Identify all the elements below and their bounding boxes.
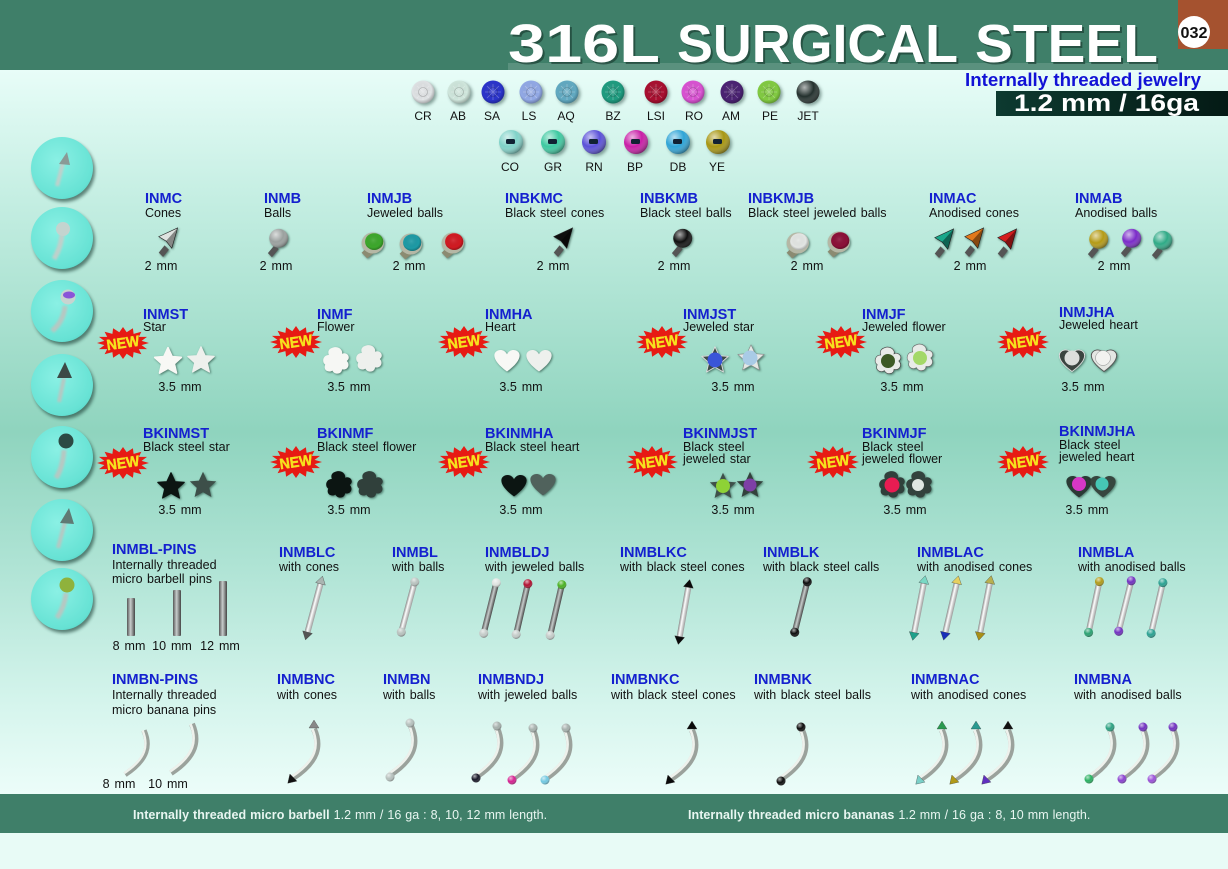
badge: new: NEW	[824, 332, 859, 353]
product: INMBN: INMBN	[383, 672, 431, 688]
row 5: bananas	[103, 672, 1182, 791]
product: INMBLAC	[908, 545, 1032, 641]
legend: anodised colours: DB	[670, 160, 686, 174]
badge: new: NEW	[816, 452, 851, 473]
product: INMAB: 2 mm	[1098, 259, 1130, 273]
legend: anodised colours: BP	[627, 160, 643, 174]
product: INMBLDJ	[478, 545, 584, 641]
product: INMBL-PINS	[112, 542, 240, 653]
product: INMBNC: INMBNC	[277, 672, 336, 688]
product: INMJB: INMJB	[367, 191, 412, 207]
product: BKINMJF: 3.5 mm	[883, 503, 927, 517]
product: INMBN-PINS: INMBN-PINS	[112, 672, 199, 688]
product: INMBN-PINS: 10 mm	[148, 777, 188, 791]
product: INMJF	[862, 307, 946, 394]
legend: crystal colours: AB	[450, 109, 466, 123]
product: INMBN	[382, 672, 435, 782]
product: INMB: INMB	[264, 191, 301, 207]
legend: anodised colours	[499, 130, 732, 174]
product: INMHA: 3.5 mm	[499, 380, 543, 394]
product: INMBNDJ: INMBNDJ	[478, 672, 544, 688]
product: INMB: 2 mm	[260, 259, 292, 273]
product: INMBL-PINS: 10 mm	[152, 639, 192, 653]
product: INMAB	[1075, 191, 1172, 273]
product: INMBL-PINS: micro barbell pins	[112, 572, 212, 586]
product: BKINMJF	[861, 426, 942, 517]
badge: new: NEW	[106, 333, 141, 354]
product: INBKMB: Black steel balls	[640, 206, 732, 220]
product: INMBNA: INMBNA	[1074, 672, 1133, 688]
badge: new	[97, 447, 149, 479]
product: INMST: INMST	[143, 307, 188, 323]
title: 316L	[510, 16, 662, 76]
row 2	[143, 305, 1138, 394]
badge: new	[270, 446, 322, 478]
legend: crystal colours: BZ	[605, 109, 621, 123]
page tab	[1178, 0, 1228, 49]
product: BKINMJST: 3.5 mm	[711, 503, 755, 517]
badge: new: NEW	[635, 452, 670, 473]
product: BKINMJF: BKINMJF	[862, 426, 927, 442]
product: INMHA	[485, 307, 552, 394]
product: INMB: Balls	[264, 206, 291, 220]
product: BKINMST: Black steel star	[143, 440, 230, 454]
product: INMJB	[362, 191, 464, 273]
product: BKINMST	[143, 426, 230, 517]
product: INMBNC	[276, 672, 337, 787]
thumbnail: ball	[31, 207, 95, 272]
row 1	[145, 191, 1172, 273]
product: BKINMJST: jeweled star	[682, 452, 751, 466]
product: INMF	[317, 307, 382, 394]
product: BKINMJST: BKINMJST	[683, 426, 757, 442]
product: INMBLK: with black steel calls	[762, 560, 879, 574]
product: INMBLKC: with black steel cones	[619, 560, 745, 574]
product: INMBL-PINS: 8 mm	[113, 639, 145, 653]
product: BKINMF	[317, 426, 416, 517]
thumbnail: black ball	[31, 426, 95, 491]
legend: crystal colours: AM	[722, 109, 740, 123]
product: BKINMST: BKINMST	[143, 426, 209, 442]
product: BKINMST: 3.5 mm	[158, 503, 202, 517]
product: BKINMJST: Black steel	[683, 440, 744, 454]
product: INMBL-PINS: 12 mm	[200, 639, 240, 653]
product: INMST: Star	[143, 320, 166, 334]
badge: new: NEW	[279, 332, 314, 353]
product: INMJST: INMJST	[683, 307, 736, 323]
product: BKINMJHA: BKINMJHA	[1059, 424, 1136, 440]
product: INMBL: with balls	[391, 560, 444, 574]
product: INMAC: INMAC	[929, 191, 977, 207]
product: INMBNAC: with anodised cones	[910, 688, 1026, 702]
product: INMC	[145, 191, 183, 273]
badge: new: NEW	[645, 332, 680, 353]
badge: new	[438, 446, 490, 478]
title	[508, 14, 1160, 76]
legend: anodised colours: YE	[709, 160, 725, 174]
product: INMST	[143, 307, 214, 394]
product: INMJHA: Jeweled heart	[1059, 318, 1138, 332]
product: INMBLC: INMBLC	[279, 545, 336, 561]
legend: crystal colours: PE	[762, 109, 778, 123]
page number: 032	[1180, 25, 1208, 42]
product: INMBLA: with anodised balls	[1077, 560, 1186, 574]
thumbnail: anodised cone	[31, 499, 95, 564]
product: INMJB: 2 mm	[393, 259, 425, 273]
product: INMAC: 2 mm	[954, 259, 986, 273]
product: INBKMB: INBKMB	[640, 191, 698, 207]
panel: side thumbnails	[31, 137, 95, 633]
product: INMBLDJ: INMBLDJ	[485, 545, 549, 561]
legend: anodised colours: CO	[501, 160, 519, 174]
product: INBKMC: Black steel cones	[505, 206, 604, 220]
product: BKINMJHA: Black steel	[1059, 438, 1120, 452]
product: INMAB: Anodised balls	[1075, 206, 1157, 220]
product: INMBLDJ: with jeweled balls	[484, 560, 584, 574]
legend: crystal colours: LSI	[647, 109, 665, 123]
product: BKINMJF: jeweled flower	[861, 452, 942, 466]
footer note: barbell: Internally threaded micro barbell 1.2 mm / 16 ga : 8, 10, 12 mm length.	[133, 808, 547, 822]
product: BKINMJF: Black steel	[862, 440, 923, 454]
product: INMBL	[391, 545, 444, 638]
gauge bar: 1.2 mm / 16ga	[1014, 90, 1200, 117]
product: INMHA: Heart	[485, 320, 516, 334]
product: INMBN-PINS: Internally threaded	[112, 688, 217, 702]
footer band	[0, 794, 1228, 833]
product: INMJST	[683, 307, 764, 394]
product: INMJHA	[1059, 305, 1138, 394]
product: BKINMJHA	[1058, 424, 1136, 517]
badge: new	[807, 446, 859, 478]
product: INMST: 3.5 mm	[158, 380, 202, 394]
product: INMBLC	[278, 545, 339, 641]
product: INMC: INMC	[145, 191, 183, 207]
badge: new	[97, 327, 149, 359]
product: INMJF: 3.5 mm	[880, 380, 924, 394]
product: INBKMB	[640, 191, 732, 273]
product: BKINMHA: 3.5 mm	[499, 503, 543, 517]
product: BKINMHA: Black steel heart	[485, 440, 580, 454]
badge: new	[997, 326, 1049, 358]
page number	[1178, 16, 1210, 48]
row 4: barbells	[112, 542, 1186, 653]
product: INBKMJB: 2 mm	[791, 259, 823, 273]
title: STEEL	[977, 16, 1160, 76]
thumbnail: cone	[31, 137, 95, 202]
product: INMAC: Anodised cones	[929, 206, 1019, 220]
product: INMBNDJ: with jeweled balls	[477, 688, 577, 702]
badge: new	[636, 326, 688, 358]
product: INMBNDJ	[472, 672, 577, 784]
product: INMBNK: with black steel balls	[753, 688, 871, 702]
product: INMBNKC: with black steel cones	[610, 688, 736, 702]
title: SURGICAL	[679, 16, 960, 76]
product: INMAB: INMAB	[1075, 191, 1123, 207]
legend: crystal colours: CR	[414, 109, 432, 123]
badge: new: NEW	[447, 452, 482, 473]
product: INBKMJB	[748, 191, 886, 273]
title: STEEL	[975, 14, 1158, 74]
product: INMBLKC	[619, 545, 745, 645]
thumbnail: jeweled ball	[31, 280, 95, 345]
row 3	[143, 424, 1136, 517]
product: INBKMB: 2 mm	[658, 259, 690, 273]
product: INMBN-PINS: 8 mm	[103, 777, 135, 791]
product: INBKMC: INBKMC	[505, 191, 564, 207]
product: INMBNKC: INMBNKC	[611, 672, 680, 688]
product: INMBN-PINS: micro banana pins	[112, 703, 216, 717]
product: INMBNAC	[910, 672, 1026, 788]
product: INMJF: INMJF	[862, 307, 906, 323]
legend: anodised colours: GR	[544, 160, 562, 174]
product: BKINMJST	[682, 426, 763, 517]
product: INMF: INMF	[317, 307, 353, 323]
product: INMC: 2 mm	[145, 259, 177, 273]
new badges	[97, 326, 1049, 479]
product: INMBL: INMBL	[392, 545, 438, 561]
product: INMBNK	[753, 672, 871, 786]
product: INMBNC: with cones	[276, 688, 337, 702]
subtitle: Internally threaded jewelry	[965, 69, 1202, 90]
header band	[0, 0, 1228, 70]
product: BKINMF: 3.5 mm	[327, 503, 371, 517]
product: INMAC	[929, 191, 1019, 273]
badge: new: NEW	[106, 453, 141, 474]
badge: new	[626, 446, 678, 478]
gauge bar	[996, 90, 1228, 117]
product: BKINMHA	[485, 426, 580, 517]
product: INMJHA: INMJHA	[1059, 305, 1115, 321]
legend: crystal colours: RO	[685, 109, 703, 123]
product: BKINMF: BKINMF	[317, 426, 374, 442]
product: INMHA: INMHA	[485, 307, 533, 323]
thumbnail: anodised ball	[31, 568, 95, 633]
product: INMBN: with balls	[382, 688, 435, 702]
thumbnail: black cone	[31, 354, 95, 419]
badge: new: NEW	[279, 452, 314, 473]
product: INMBNKC	[610, 672, 736, 788]
product: INMBL-PINS: INMBL-PINS	[112, 542, 197, 558]
product: INMJST: 3.5 mm	[711, 380, 755, 394]
badge: new: NEW	[1006, 452, 1041, 473]
product: INMBLA	[1077, 545, 1186, 639]
product: INMBLA: INMBLA	[1078, 545, 1135, 561]
product: INMJST: Jeweled star	[683, 320, 754, 334]
product: INMC: Cones	[145, 206, 181, 220]
product: INBKMC	[505, 191, 604, 273]
legend: crystal colours: SA	[484, 109, 500, 123]
product: INMBNAC: INMBNAC	[911, 672, 980, 688]
product: INMB	[260, 191, 301, 273]
badge: new	[438, 326, 490, 358]
badge: new: NEW	[1006, 332, 1041, 353]
legend: crystal colours: LS	[522, 109, 536, 123]
title: 316L	[508, 14, 660, 74]
product: INMF: 3.5 mm	[327, 380, 371, 394]
product: BKINMJHA: jeweled heart	[1058, 450, 1135, 464]
badge: new	[270, 326, 322, 358]
product: INMBNK: INMBNK	[754, 672, 813, 688]
product: INMJB: Jeweled balls	[367, 206, 443, 220]
product: INMJHA: 3.5 mm	[1061, 380, 1105, 394]
product: INBKMC: 2 mm	[537, 259, 569, 273]
product: INMBNA: with anodised balls	[1073, 688, 1182, 702]
legend: crystal colours: JET	[797, 109, 819, 123]
product: INMBLC: with cones	[278, 560, 339, 574]
footer note: bananas: Internally threaded micro bananas 1.2 mm / 16 ga : 8, 10 mm length.	[688, 808, 1090, 822]
legend: crystal colours: AQ	[557, 109, 575, 123]
legend: anodised colours: RN	[585, 160, 603, 174]
product: INMBLK	[762, 545, 879, 638]
badge: new	[997, 446, 1049, 478]
legend: crystal colours	[412, 80, 822, 123]
title: SURGICAL	[677, 14, 958, 74]
product: INMBLKC: INMBLKC	[620, 545, 687, 561]
product: INMBLK: INMBLK	[763, 545, 820, 561]
badge: new	[815, 326, 867, 358]
product: INMBLAC: INMBLAC	[917, 545, 984, 561]
product: INMBN-PINS	[103, 672, 217, 791]
badge: new: NEW	[447, 332, 482, 353]
product: INMJF: Jeweled flower	[862, 320, 946, 334]
product: INBKMJB: INBKMJB	[748, 191, 814, 207]
product: INMBNA	[1073, 672, 1182, 784]
product: BKINMHA: BKINMHA	[485, 426, 554, 442]
product: BKINMJHA: 3.5 mm	[1065, 503, 1109, 517]
product: INMBLAC: with anodised cones	[916, 560, 1032, 574]
product: INBKMJB: Black steel jeweled balls	[748, 206, 886, 220]
product: BKINMF: Black steel flower	[317, 440, 416, 454]
product: INMF: Flower	[317, 320, 355, 334]
bottom strip	[0, 833, 1228, 869]
product: INMBL-PINS: Internally threaded	[112, 558, 217, 572]
